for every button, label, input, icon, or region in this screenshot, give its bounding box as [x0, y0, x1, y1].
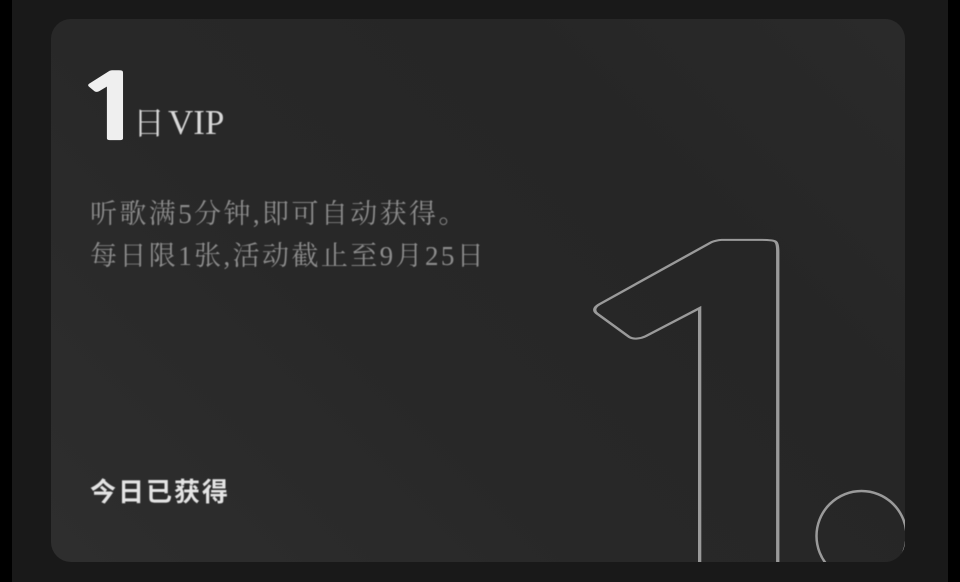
description text	[90, 199, 486, 271]
description text: 听歌满5分钟,即可自动获得。	[90, 199, 468, 229]
heading: VIP: VIP	[168, 103, 224, 142]
description text: 每日限1张,活动截止至9月25日	[90, 241, 486, 271]
status label: obtained today: 今日已获得	[90, 477, 230, 507]
heading: numeral 1: 1	[72, 64, 152, 153]
heading: 1 day: 日	[133, 105, 165, 141]
